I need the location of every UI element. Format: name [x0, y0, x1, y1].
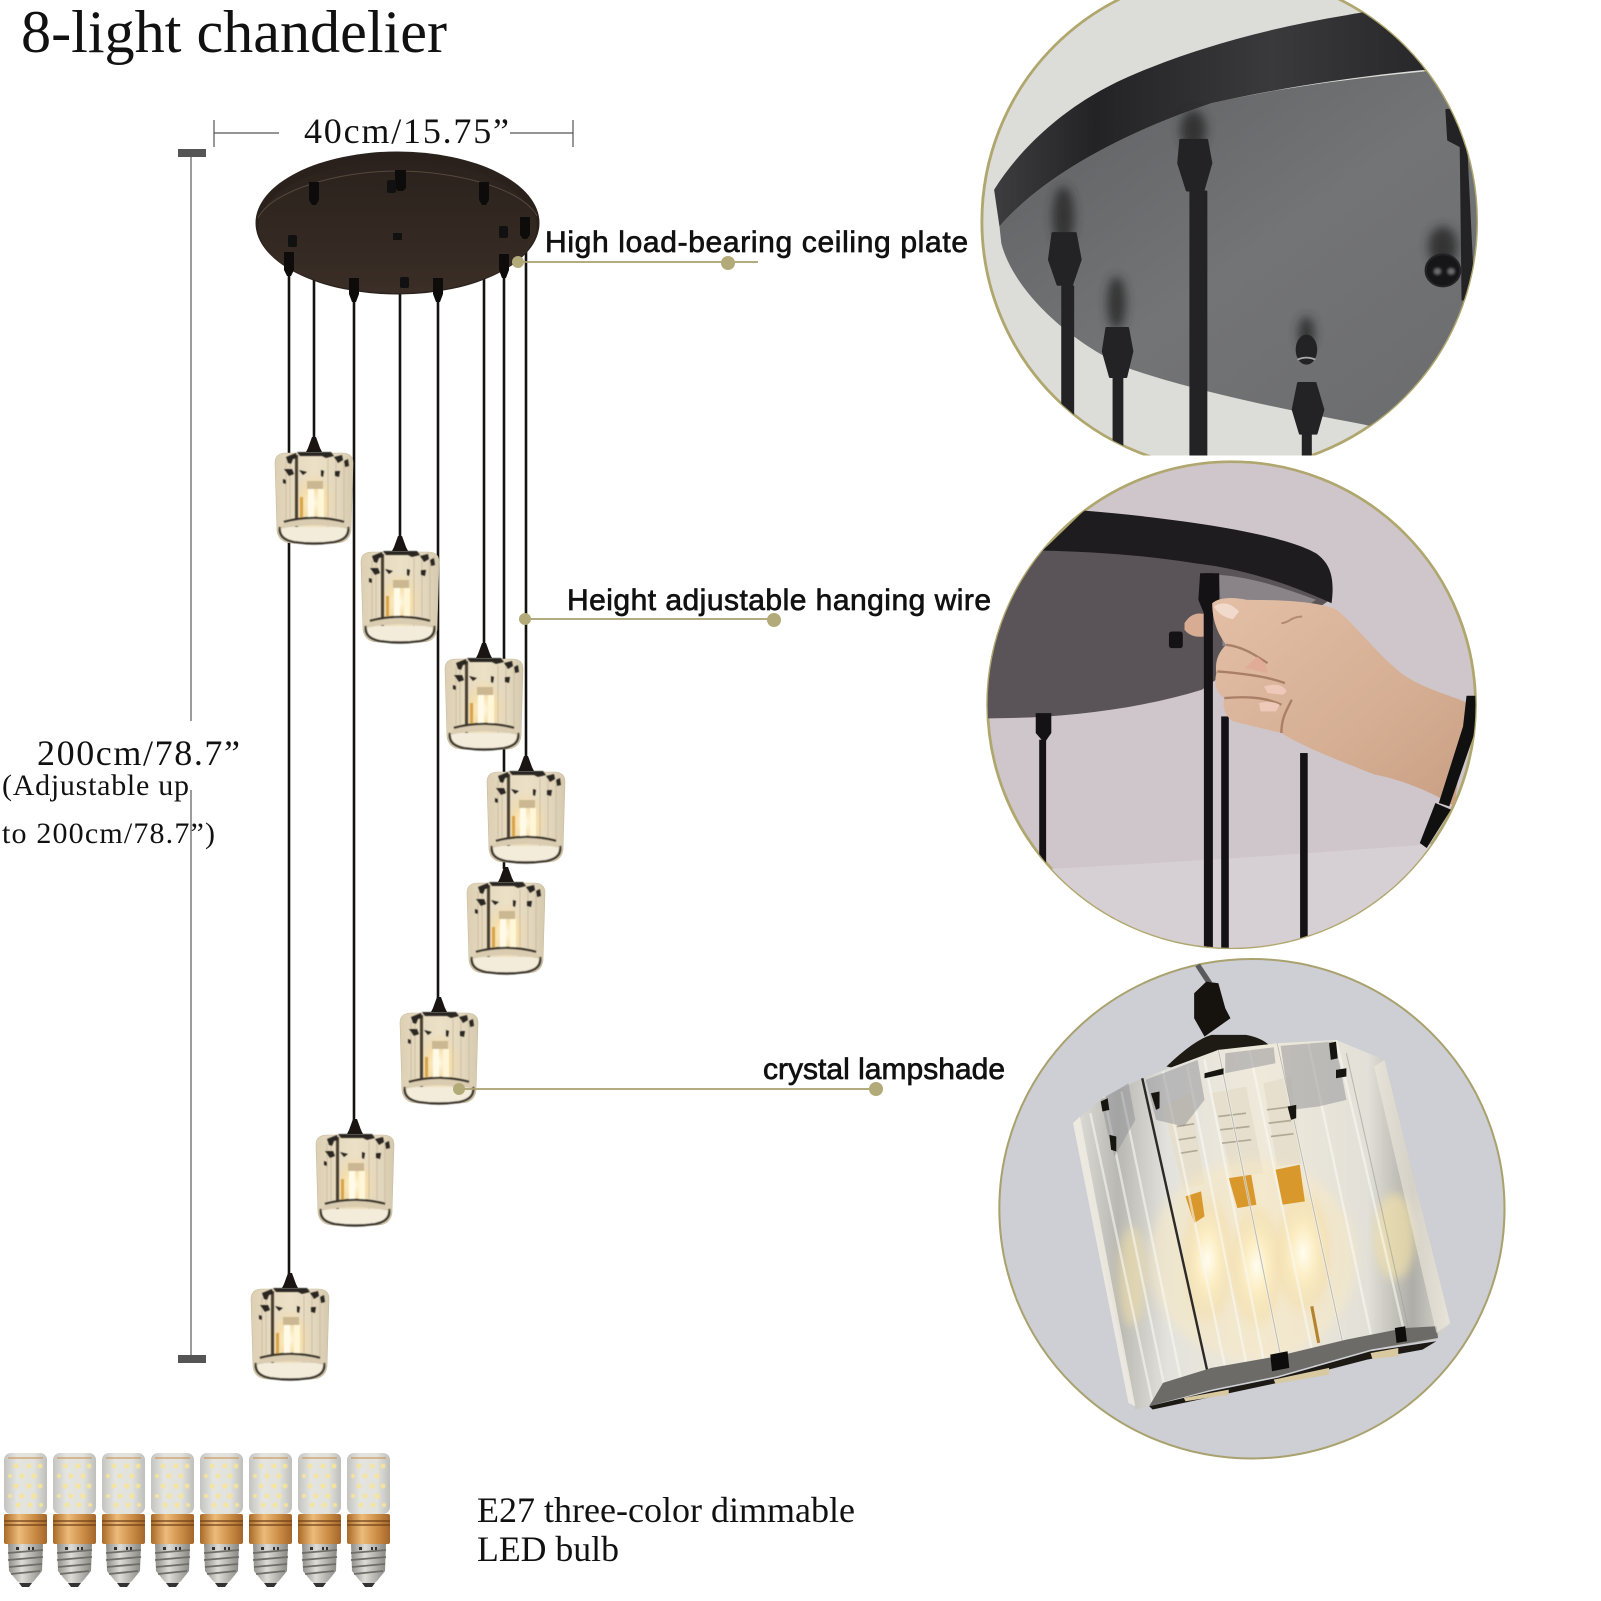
bulb caption: E27 three-color dimmable [477, 1490, 855, 1530]
lamp 3 [445, 643, 523, 750]
wires [289, 175, 526, 1275]
top reflections [1101, 1042, 1346, 1156]
connectors and wires [1049, 110, 1473, 478]
plate rim [994, 12, 1425, 226]
hand [1185, 598, 1468, 806]
title: 8-light chandelier [21, 0, 447, 65]
wires [1036, 573, 1308, 950]
lamp 5 [467, 867, 545, 974]
bottom ring [1149, 1326, 1438, 1406]
prism lines [1090, 1040, 1405, 1403]
plate underside [1000, 71, 1477, 426]
chandelier [251, 152, 565, 1380]
plate knob [1169, 631, 1183, 648]
wall [1052, 844, 1432, 948]
height label: 200cm/78.7” [37, 733, 240, 773]
callout: ceiling plate: High load-bearing ceiling plate [545, 226, 968, 259]
plate underside [970, 547, 1330, 718]
bracelet [1420, 696, 1477, 848]
detail circle: crystal lampshade [999, 959, 1505, 1459]
plate rim [1043, 511, 1333, 603]
callout: ceiling plate [512, 226, 968, 270]
crystal shade [1073, 1040, 1450, 1410]
cable and socket [1166, 965, 1270, 1070]
gold bases [1185, 1165, 1305, 1223]
detail circle: hanging wire [970, 462, 1489, 960]
bulb caption [477, 1490, 855, 1569]
bulb 6 [249, 1453, 292, 1587]
lamp 6 [400, 997, 478, 1104]
bulb 7 [298, 1453, 341, 1587]
width label: 40cm/15.75” [304, 111, 509, 151]
bulb row [4, 1453, 390, 1587]
bulb 8 [347, 1453, 390, 1587]
bulb 2 [53, 1453, 96, 1587]
lamp 8 [251, 1273, 329, 1380]
bulb 3 [102, 1453, 145, 1587]
sockets [1163, 1077, 1301, 1190]
callout: crystal lampshade [453, 1053, 1005, 1096]
shadows [1053, 110, 1457, 350]
bulb 1 [4, 1453, 47, 1587]
callout: hanging wire [519, 584, 991, 627]
bulb glow [1149, 1160, 1357, 1360]
lamp 4 [487, 756, 565, 862]
height note: (Adjustable up [2, 769, 189, 802]
width dimension [214, 111, 573, 151]
bulb 5 [200, 1453, 243, 1587]
bulb caption: LED bulb [477, 1529, 619, 1569]
bulb 4 [151, 1453, 194, 1587]
ceiling plate [256, 152, 540, 302]
height dimension: to 200cm/78.7”) [2, 817, 215, 850]
lamp 1 [275, 437, 353, 544]
lamp 7 [316, 1119, 394, 1226]
callout: hanging wire: Height adjustable hanging wire [567, 584, 991, 617]
detail circle: ceiling plate [980, 0, 1478, 456]
height dimension [2, 149, 240, 1363]
lamp 2 [361, 536, 439, 642]
callout: crystal lampshade: crystal lampshade [763, 1053, 1005, 1086]
